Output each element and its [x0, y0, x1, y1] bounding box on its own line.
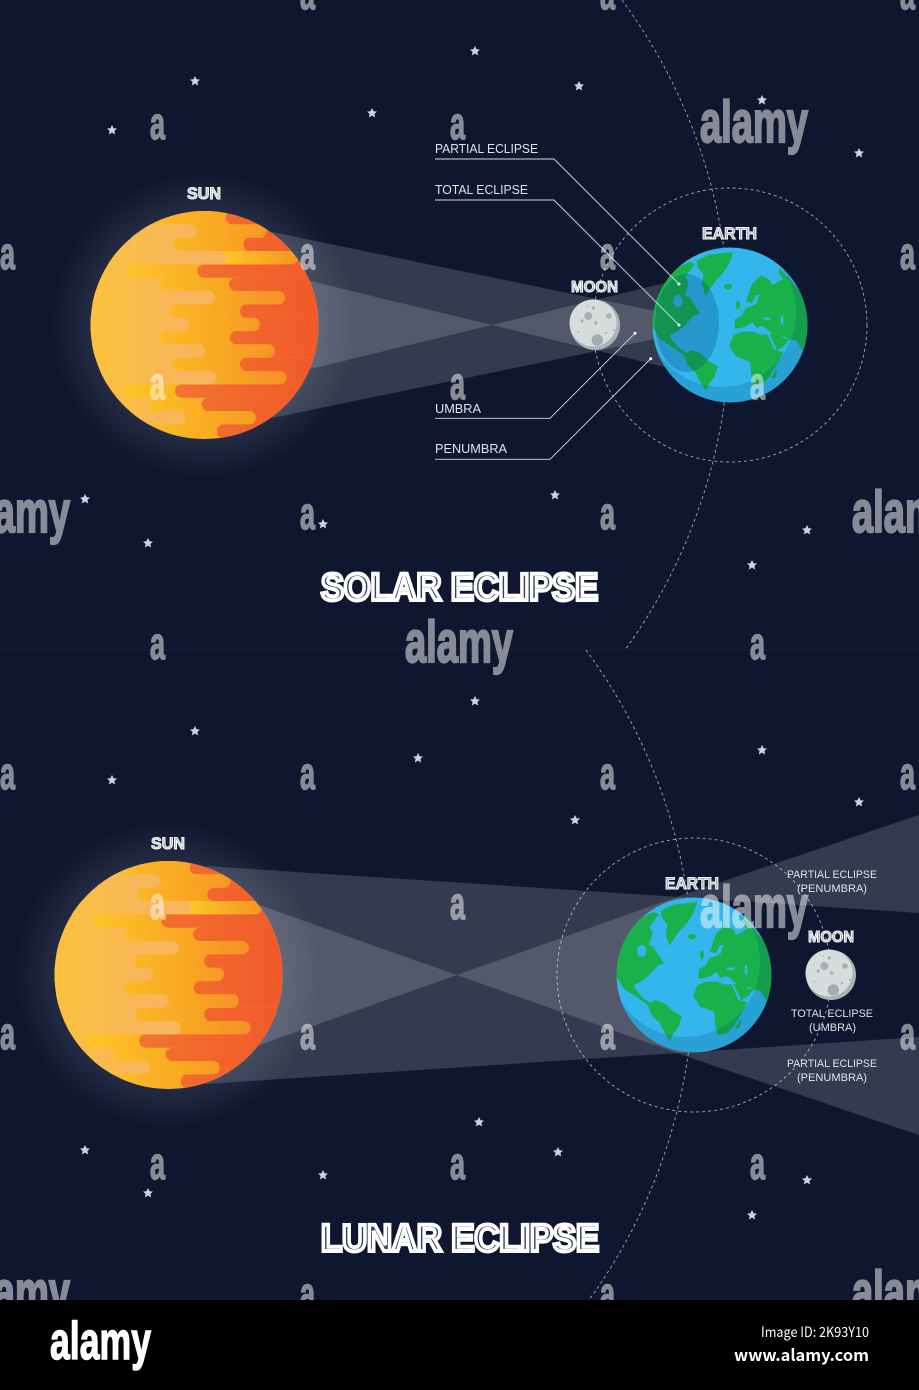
- footer logo: alamy: [50, 1312, 151, 1371]
- callouts: solar: TOTAL ECLIPSE: [435, 182, 528, 197]
- watermarks: a: [0, 748, 16, 799]
- footer image id: Image ID: 2K93Y10: [761, 1322, 869, 1342]
- watermarks: a: [0, 228, 16, 279]
- sun: solar: [50, 171, 359, 479]
- watermarks: a: [300, 1268, 316, 1319]
- watermarks: a: [600, 1268, 616, 1319]
- panel: solar eclipse: [50, 0, 867, 650]
- watermarks: a: [750, 1138, 766, 1189]
- watermarks: a: [150, 878, 166, 929]
- shadow labels: lunar: PARTIAL ECLIPSE: [787, 869, 877, 881]
- earth: solar: [652, 248, 808, 402]
- footer bar: [0, 1300, 919, 1390]
- watermarks: a: [600, 488, 616, 539]
- light cones: solar: [272, 232, 665, 418]
- watermarks: a: [300, 1008, 316, 1059]
- earth label: lunar: EARTH: [665, 874, 719, 893]
- earth: lunar: [604, 885, 784, 1065]
- moon label: solar: MOON: [571, 279, 618, 296]
- watermarks: alamy: [700, 90, 808, 155]
- shadow labels: lunar: TOTAL ECLIPSE: [791, 1008, 873, 1020]
- orbit paths: solar: [593, 0, 867, 650]
- shadow labels: lunar: (PENUMBRA): [797, 883, 867, 895]
- stars: [80, 46, 864, 1220]
- moon: solar: [570, 300, 620, 350]
- watermarks: a: [600, 748, 616, 799]
- callouts: solar: PARTIAL ECLIPSE: [435, 141, 538, 156]
- shadow labels: lunar: (PENUMBRA): [797, 1072, 867, 1084]
- watermarks: a: [450, 1138, 466, 1189]
- watermarks: a: [150, 1138, 166, 1189]
- shadow labels: lunar: PARTIAL ECLIPSE: [787, 1058, 877, 1070]
- callouts: solar: PENUMBRA: [435, 441, 507, 456]
- watermarks: a: [300, 748, 316, 799]
- watermarks: a: [150, 358, 166, 409]
- earth label: solar: EARTH: [702, 224, 757, 243]
- sun: lunar: [14, 821, 323, 1129]
- watermarks: a: [300, 488, 316, 539]
- sun label: lunar: SUN: [151, 834, 185, 853]
- watermarks: a: [150, 98, 166, 149]
- callouts: solar: [435, 141, 680, 459]
- moon: lunar: [806, 950, 856, 1000]
- watermarks: alamy: [405, 610, 513, 675]
- watermarks: a: [450, 358, 466, 409]
- orbit paths: lunar: [557, 650, 831, 1300]
- sun label: solar: SUN: [187, 184, 221, 203]
- watermarks: alamy: [700, 875, 808, 940]
- watermarks: a: [450, 98, 466, 149]
- watermarks: a: [150, 618, 166, 669]
- shadow labels: lunar: [787, 869, 877, 1084]
- watermarks: a: [0, 1008, 16, 1059]
- watermarks: a: [600, 1008, 616, 1059]
- title: solar eclipse: SOLAR ECLIPSE: [321, 567, 598, 609]
- watermarks: a: [450, 878, 466, 929]
- shadow labels: lunar: (UMBRA): [809, 1022, 856, 1034]
- light cones: lunar: [205, 815, 919, 1135]
- watermarks: a: [750, 358, 766, 409]
- watermarks: a: [750, 618, 766, 669]
- footer url: www.alamy.com: [734, 1342, 869, 1366]
- title: lunar eclipse: LUNAR ECLIPSE: [321, 1218, 599, 1260]
- panel: lunar eclipse: [14, 650, 919, 1300]
- callouts: solar: UMBRA: [435, 401, 481, 416]
- watermarks: a: [600, 228, 616, 279]
- moon label: lunar: MOON: [808, 929, 854, 946]
- watermarks: a: [300, 228, 316, 279]
